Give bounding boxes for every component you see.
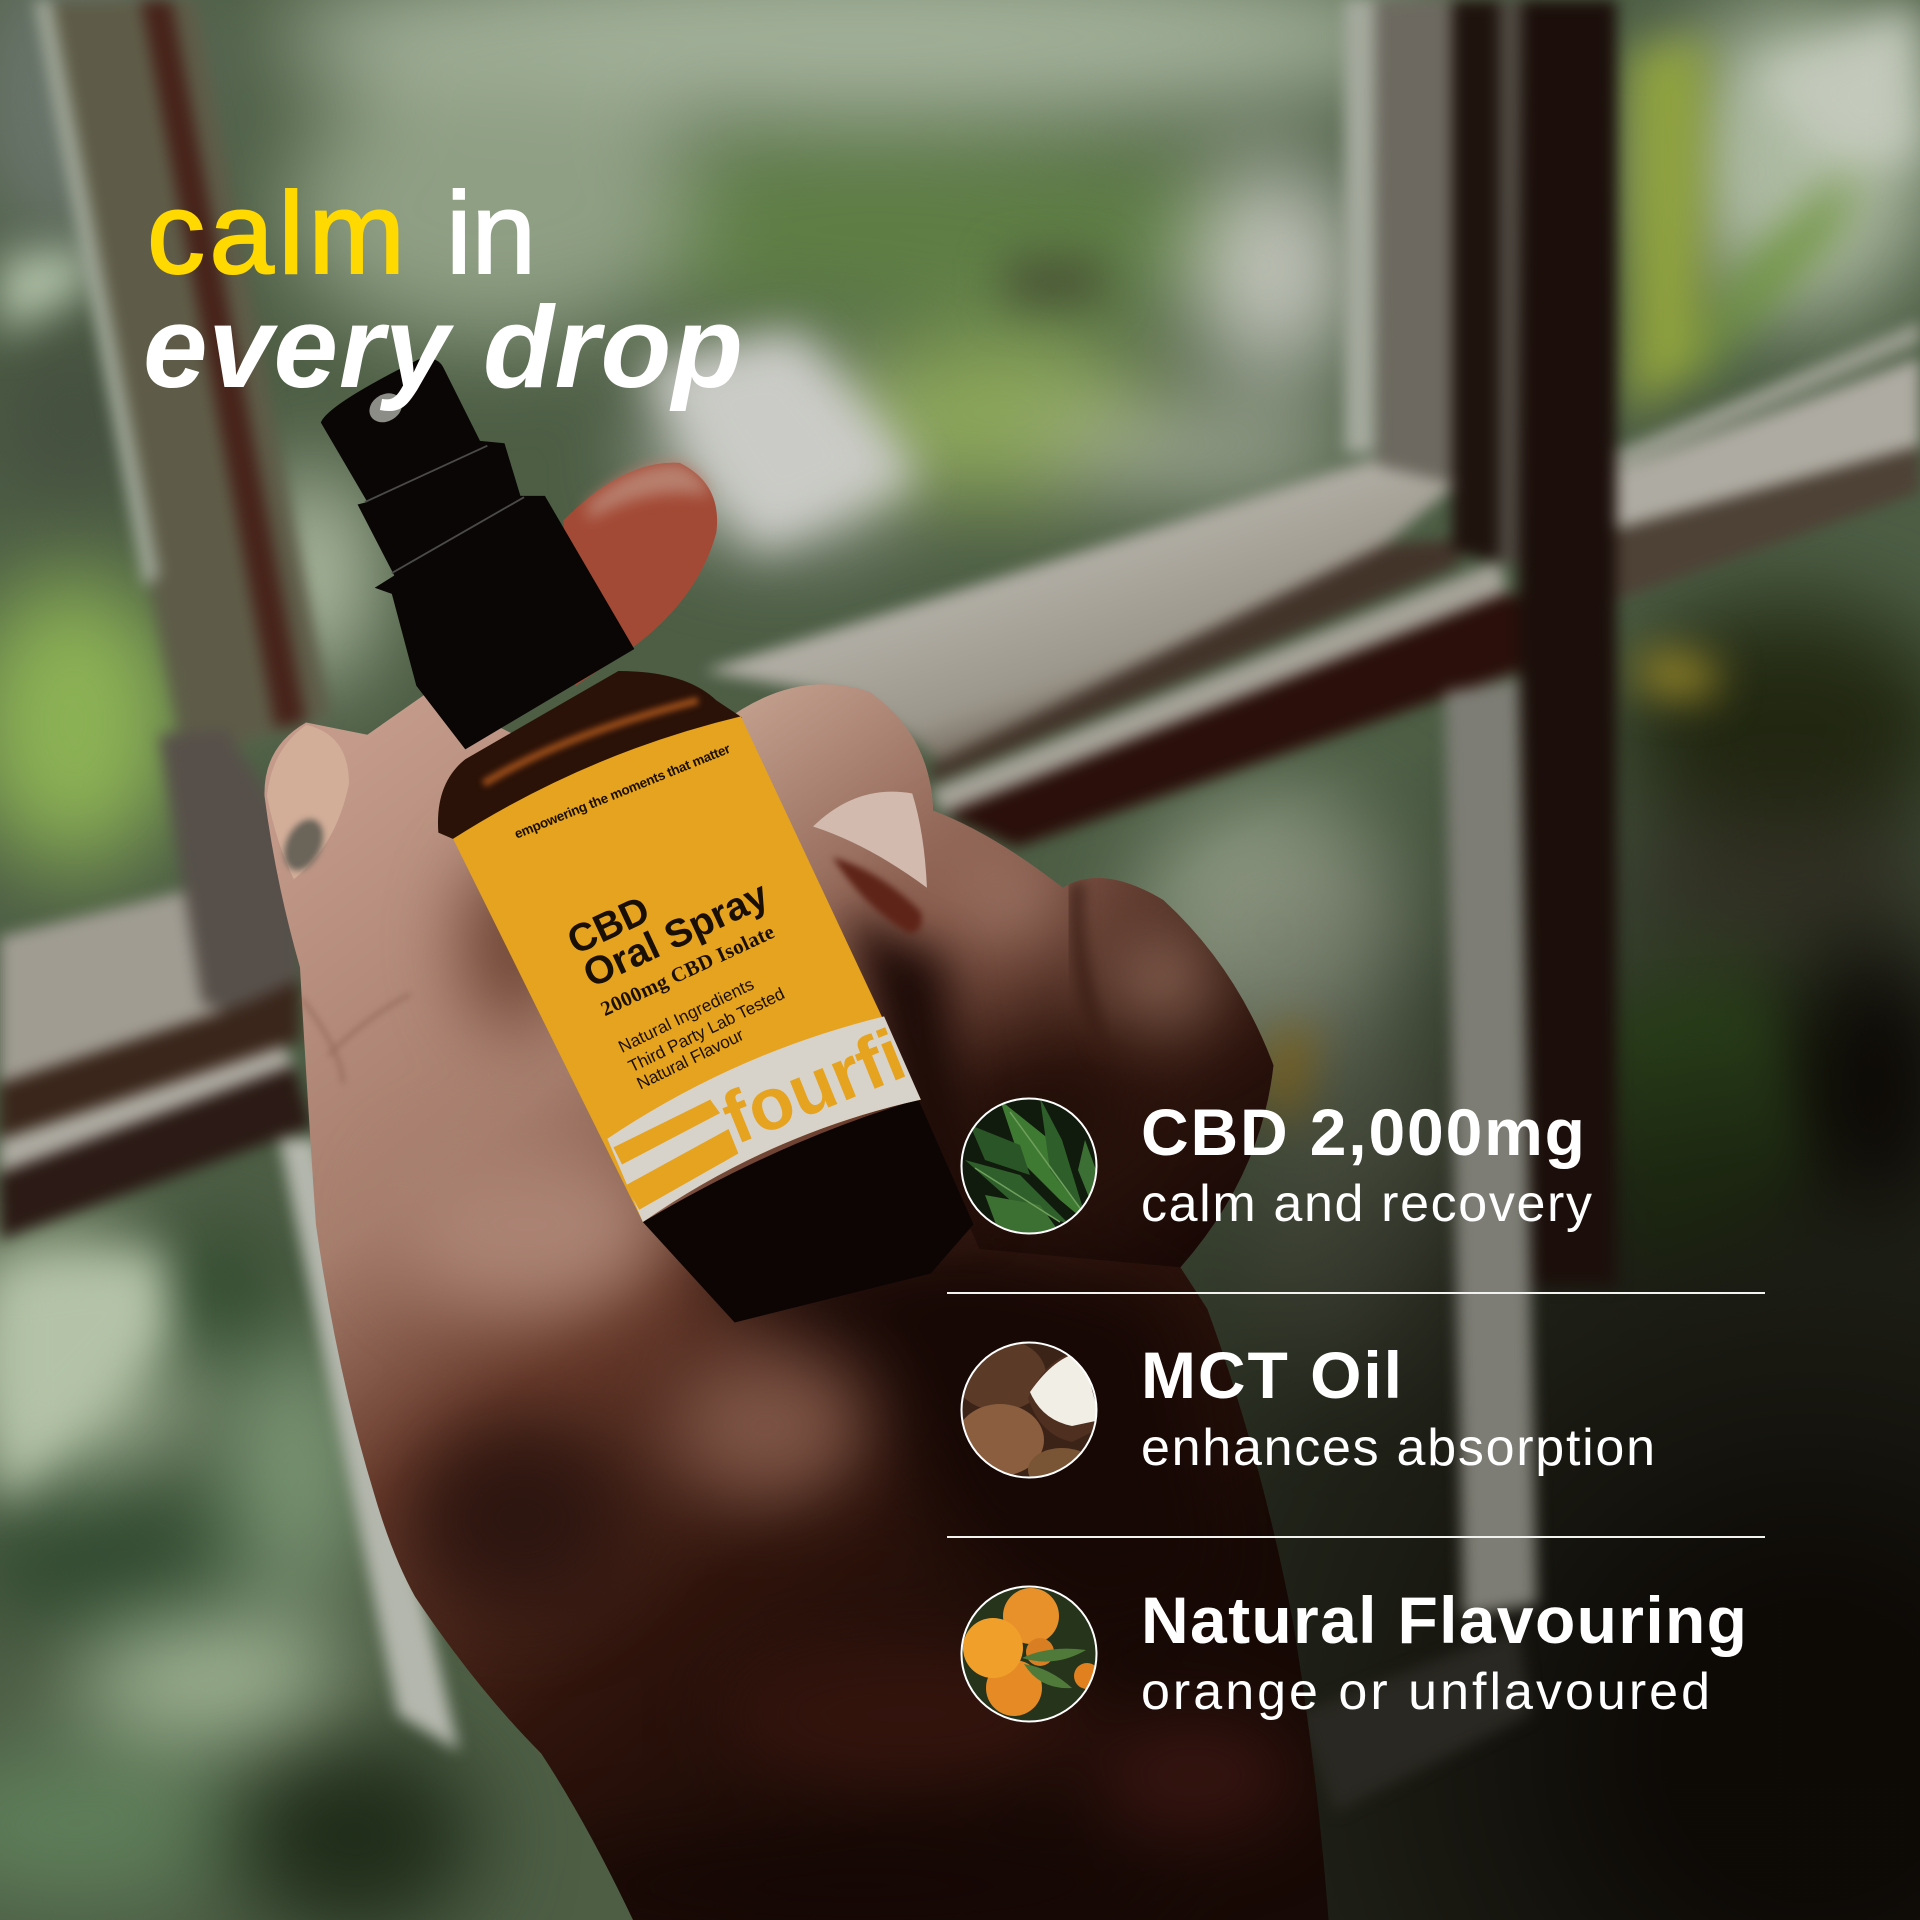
nozzle hole <box>364 388 407 428</box>
label text: CBD <box>561 888 656 963</box>
ingredient: CBD <box>960 1095 1592 1240</box>
icon: cannabis leaves <box>960 1098 1100 1240</box>
title: calm <box>147 168 405 298</box>
divider <box>947 1292 1765 1294</box>
brand: fourfive <box>711 982 992 1160</box>
label text: Natural Ingredients <box>615 974 757 1057</box>
label text <box>512 741 788 1093</box>
title <box>143 168 743 412</box>
label bars <box>613 1100 738 1210</box>
ingredient: Natural Flavouring <box>960 1583 1747 1722</box>
icon: oranges <box>960 1586 1100 1722</box>
photo: CBD oral spray bottle <box>321 358 992 1322</box>
divider <box>947 1536 1765 1538</box>
subtext: enhances absorption <box>1141 1419 1655 1477</box>
knuckle shadow <box>845 906 980 1224</box>
body below label <box>643 1100 973 1322</box>
title: in <box>446 168 536 298</box>
ingredient: MCT Oil <box>960 1342 1652 1478</box>
heading: CBD 2,000mg <box>1141 1095 1585 1169</box>
label band <box>607 1016 921 1222</box>
heading: MCT Oil <box>1141 1338 1402 1412</box>
glass shoulder <box>438 671 742 840</box>
subtext: orange or unflavoured <box>1141 1663 1710 1721</box>
icon: coconuts <box>960 1342 1098 1478</box>
thumb nail <box>267 725 349 879</box>
index finger <box>563 463 717 686</box>
label <box>453 716 921 1222</box>
subtext: calm and recovery <box>1141 1175 1592 1233</box>
label text: Oral Spray <box>577 874 775 996</box>
label text: 2000mg CBD Isolate <box>597 919 778 1021</box>
photo: hand holding the bottle <box>245 463 1347 1920</box>
label text: Third Party Lab Tested <box>625 983 788 1076</box>
finger nail <box>813 792 927 888</box>
label text: Natural Flavour <box>633 1024 747 1093</box>
label text: empowering the moments that matter <box>512 741 733 842</box>
back of hand and fingers <box>245 661 1347 1920</box>
cap highlights <box>365 446 524 573</box>
spray nozzle and cap <box>321 358 634 749</box>
heading: Natural Flavouring <box>1141 1583 1747 1657</box>
title: every drop <box>143 282 743 412</box>
